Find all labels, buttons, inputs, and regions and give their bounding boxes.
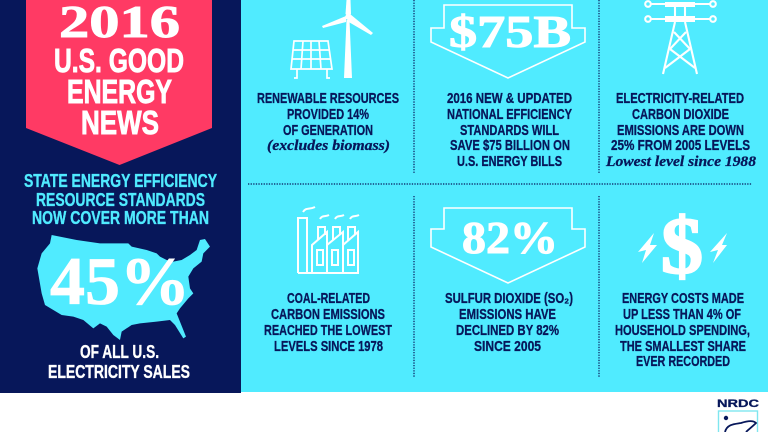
icon: solar panel and wind turbine (291, 0, 373, 78)
pink banner (26, 0, 212, 165)
coal text (264, 291, 392, 355)
carbon dioxide text (605, 91, 757, 170)
icon: dollar with lightning bolts: $ (661, 203, 703, 291)
icon: dollar with lightning bolts (638, 203, 727, 291)
efficiency standards text: U.S. ENERGY BILLS (457, 154, 562, 170)
title: U.S. GOOD (54, 43, 184, 80)
callout: $75B (431, 5, 585, 78)
callout: 82% (431, 208, 585, 283)
icon: factory (298, 207, 359, 273)
electricity sales text: OF ALL U.S. (80, 342, 159, 362)
NRDC logo: NRDC (717, 398, 759, 410)
electricity sales text (48, 342, 190, 382)
sulfur dioxide text: EMISSIONS HAVE (459, 307, 556, 323)
carbon dioxide text: Lowest level since 1988 (605, 154, 757, 170)
sulfur dioxide text: SINCE 2005 (474, 339, 541, 355)
title: ENERGY (67, 74, 172, 111)
electricity sales text: ELECTRICITY SALES (48, 362, 190, 382)
icon: US map (37, 235, 210, 340)
left navy panel (0, 0, 241, 393)
state standards heading: STATE ENERGY EFFICIENCY (24, 171, 217, 191)
carbon dioxide text: CARBON DIOXIDE (632, 107, 729, 123)
efficiency standards text: STANDARDS WILL (460, 123, 559, 139)
energy costs text (615, 291, 750, 370)
renewable text: RENEWABLE RESOURCES (257, 91, 399, 107)
coal text: COAL-RELATED (287, 291, 370, 307)
state standards heading: NOW COVER MORE THAN (32, 208, 209, 228)
efficiency standards text (447, 91, 572, 170)
callout: $75B: $75B (449, 7, 571, 57)
callout: 82%: 82% (462, 213, 558, 263)
renewable text: (excludes biomass) (267, 138, 390, 154)
icon: transmission tower (645, 1, 716, 74)
renewable text (257, 91, 399, 154)
coal text: REACHED THE LOWEST (264, 323, 392, 339)
NRDC logo (717, 398, 759, 432)
sulfur dioxide text: SULFUR DIOXIDE (SO₂) (445, 291, 573, 307)
efficiency standards text: NATIONAL EFFICIENCY (447, 107, 572, 123)
coal text: LEVELS SINCE 1978 (274, 339, 383, 355)
title: NEWS (81, 105, 159, 142)
state standards heading (24, 171, 217, 228)
title (54, 43, 184, 142)
efficiency standards text: 2016 NEW & UPDATED (447, 91, 572, 107)
coal text: CARBON EMISSIONS (271, 307, 385, 323)
sulfur dioxide text (445, 291, 573, 355)
state standards heading: RESOURCE STANDARDS (36, 190, 205, 210)
renewable text: PROVIDED 14% (287, 107, 369, 123)
cyan background panel (241, 0, 768, 392)
efficiency standards text: SAVE $75 BILLION ON (450, 138, 570, 154)
sulfur dioxide text: DECLINED BY 82% (456, 323, 559, 339)
renewable text: OF GENERATION (283, 123, 373, 139)
45 percent figure: 45% (50, 243, 190, 319)
energy costs text: EVER RECORDED (636, 354, 730, 370)
